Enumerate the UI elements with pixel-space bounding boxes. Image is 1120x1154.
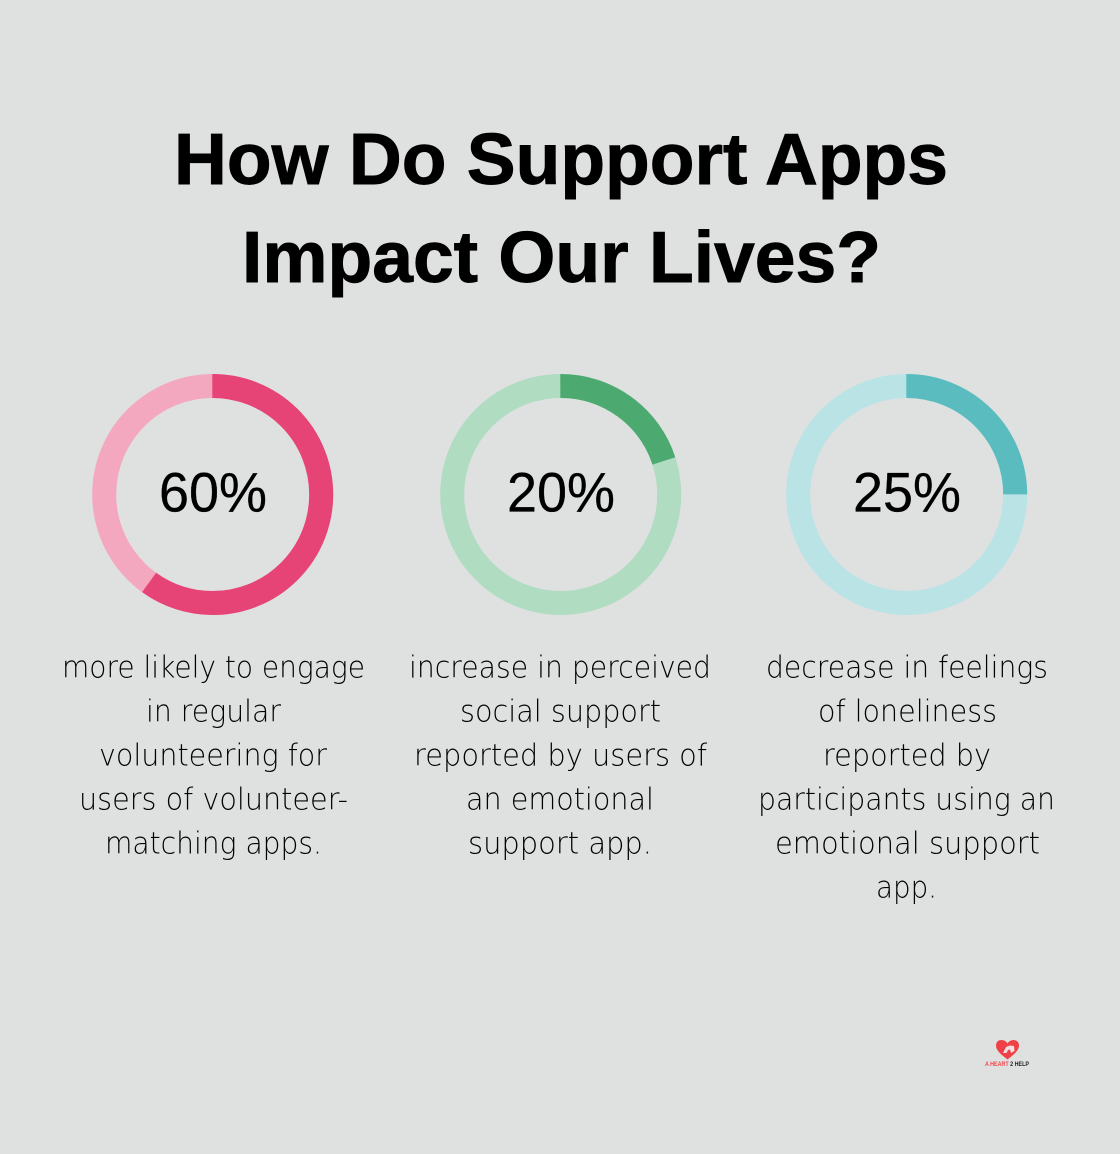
- description: loneliness: [758, 650, 1055, 906]
- description: social support: [409, 650, 711, 862]
- description: social support: support app.: [468, 826, 652, 862]
- title: How Do Support Apps: [174, 120, 948, 200]
- description: loneliness: participants using an: [758, 782, 1055, 818]
- donut chart: 25%: [798, 386, 1015, 603]
- panel: 20% social support: [409, 386, 711, 862]
- title: [174, 120, 948, 298]
- description: loneliness: reported by: [823, 738, 991, 774]
- logo: A Heart 2 Help: [985, 1040, 1029, 1068]
- description: volunteering: more likely to engage: [62, 650, 365, 686]
- description: volunteering: volunteering for: [99, 738, 327, 774]
- title: Impact Our Lives?: [242, 218, 881, 298]
- panel: 25% loneliness: [758, 386, 1055, 906]
- value: 60%: 60%: [159, 460, 267, 524]
- description: loneliness: emotional support: [775, 826, 1040, 862]
- description: social support: reported by users of: [414, 738, 707, 774]
- donut chart: 20%: [452, 386, 669, 603]
- description: loneliness: app.: [876, 870, 937, 906]
- description: social support: increase in perceived: [409, 650, 711, 686]
- description: loneliness: of loneliness: [818, 694, 997, 730]
- value: 20%: 20%: [507, 460, 615, 524]
- panel: 60% volunteering: [62, 386, 365, 862]
- description: social support: an emotional: [466, 782, 654, 818]
- description: volunteering: in regular: [146, 694, 281, 730]
- description: volunteering: users of volunteer-: [79, 782, 348, 818]
- value: 25%: 25%: [853, 460, 961, 524]
- description: social support: social support: [460, 694, 661, 730]
- description: volunteering: matching apps.: [105, 826, 322, 862]
- logo wordmark: A HEART 2 HELP: [985, 1062, 1029, 1068]
- donut chart: 60%: [104, 386, 321, 603]
- icon: heart with hands: [996, 1040, 1019, 1060]
- description: loneliness: decrease in feelings: [766, 650, 1048, 686]
- description: volunteering: [62, 650, 365, 862]
